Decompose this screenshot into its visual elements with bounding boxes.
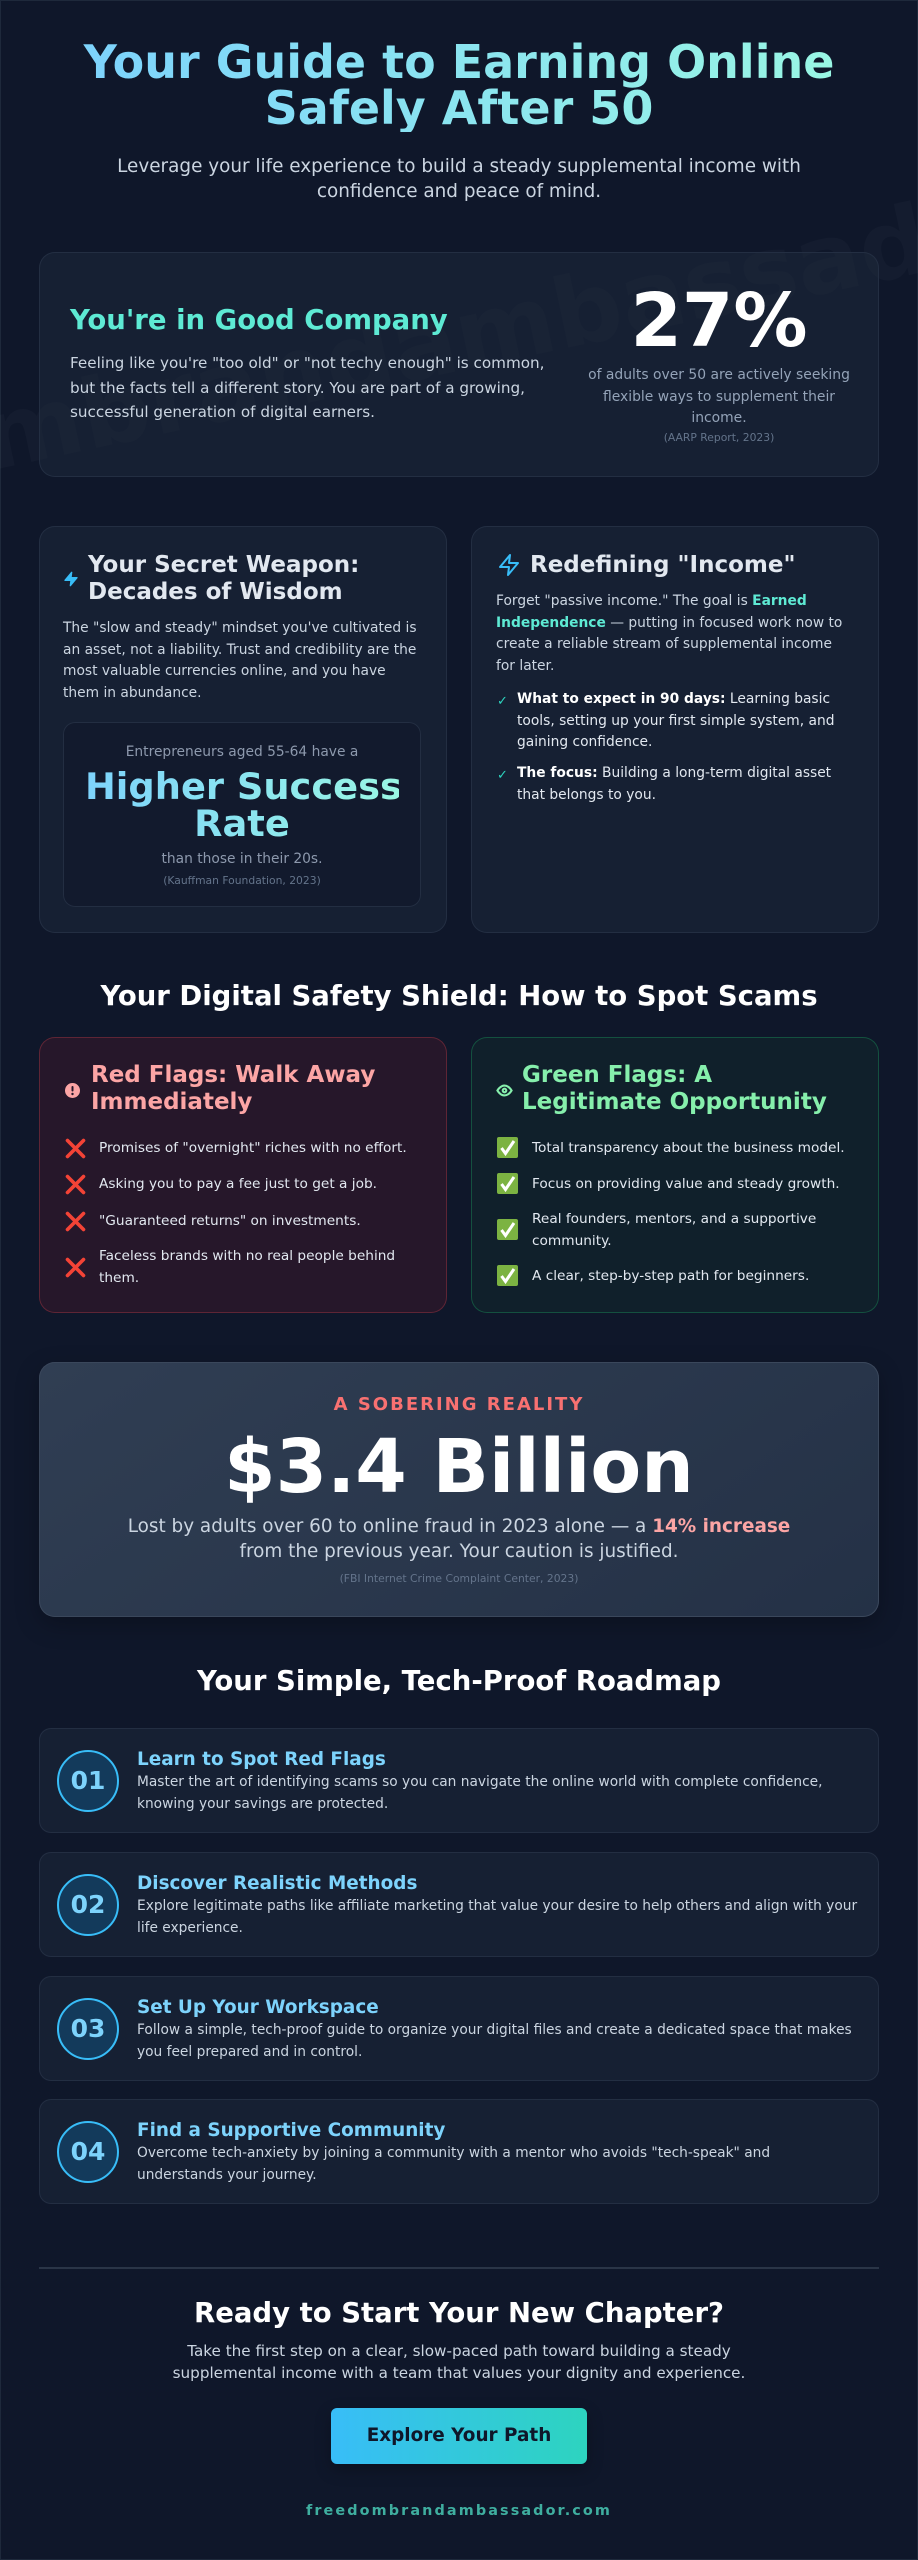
step number: 01 [71,1766,105,1795]
icon: check 2 [497,1173,518,1194]
red flag 1: Promises of "overnight" riches with no effort. [99,1140,407,1156]
heading: Redefining "Income" [530,552,795,578]
heading: Green Flags: A [522,1062,712,1088]
callout source: (Kauffman Foundation, 2023) [163,874,321,887]
label: A SOBERING REALITY [334,1394,584,1415]
step description [137,2145,770,2182]
heading: You're in Good Company [70,304,448,336]
step description: you feel prepared and in control. [137,2044,362,2060]
list item 1 [517,691,834,750]
icon: check 1 [497,1137,518,1158]
icon: cross 1 [66,1138,86,1158]
list item 2: that belongs to you. [517,787,656,803]
title [83,40,835,132]
step number [57,1874,119,1936]
body text [62,620,417,701]
panel: red flags [39,1037,447,1313]
step 2 [39,1852,879,1957]
step 4 [39,2099,879,2204]
step description: Follow a simple, tech-proof guide to organize your digital files and create a dedicated space that makes [137,2022,852,2038]
step number [57,1750,119,1812]
body text: an asset, not a liability. Trust and credibility are the [63,642,416,658]
step number: 03 [71,2014,105,2043]
list item 2 [517,765,831,803]
description: Lost by adults over 60 to online fraud in 2023 alone — a 14% increase [128,1516,790,1537]
icon: cross 2 [66,1174,86,1194]
stat source: (AARP Report, 2023) [664,431,774,444]
step description: Master the art of identifying scams so you can navigate the online world with complete confidence, [137,1774,822,1790]
step title: Learn to Spot Red Flags [137,1749,386,1770]
description [128,1516,790,1562]
big number: $3.4 Billion [224,1424,694,1510]
green flag 3 [532,1211,816,1248]
body text: successful generation of digital earners. [70,403,375,421]
list item 1: gaining confidence. [517,734,652,750]
body text: Forget "passive income." The goal is Earned [496,593,807,609]
red flag 3: "Guaranteed returns" on investments. [99,1213,361,1229]
heading [91,1062,375,1115]
step description [137,1898,858,1936]
red flag 4 [99,1248,395,1286]
step description: Overcome tech-anxiety by joining a community with a mentor who avoids "tech-speak" and [137,2145,770,2161]
panel: you're in good company [39,252,879,477]
cta text: supplemental income with a team that values your dignity and experience. [173,2364,745,2382]
callout: higher success rate [63,722,421,907]
step number [57,2121,119,2183]
source: (FBI Internet Crime Complaint Center, 2023) [340,1572,578,1585]
body text: most valuable currencies online, and you have [63,663,386,679]
body text: Feeling like you're "too old" or "not techy enough" is common, [70,354,545,372]
body text: create a reliable stream of supplemental income [496,636,832,652]
step number: 04 [71,2137,105,2166]
step title: Set Up Your Workspace [137,1997,379,2018]
subtitle: confidence and peace of mind. [317,181,601,202]
icon: bolt [64,572,78,586]
subtitle [117,156,801,202]
step description: understands your journey. [137,2166,317,2182]
icon: check 3 [497,1219,518,1240]
step description [137,2022,852,2060]
green flag 3: Real founders, mentors, and a supportive [532,1211,816,1227]
callout lead-in: Entrepreneurs aged 55-64 have a [126,744,358,760]
list item 1: tools, setting up your first simple system, and [517,713,834,729]
cta button: Explore Your Path [367,2425,551,2446]
green flag 3: community. [532,1232,612,1248]
list item 2: The focus: Building a long-term digital asset [517,765,831,781]
green flag 1: Total transparency about the business model. [532,1140,845,1156]
green flag 2: Focus on providing value and steady growth. [532,1176,840,1192]
step description: knowing your savings are protected. [137,1796,388,1812]
heading [88,552,359,605]
body text: The "slow and steady" mindset you've cultivated is [63,620,417,636]
body text: for later. [496,658,554,674]
description: from the previous year. Your caution is justified. [239,1541,678,1562]
section heading: safety shield: Your Digital Safety Shield: How to Spot Scams [100,980,818,1012]
icon: bolt outline [499,554,519,576]
callout figure [85,769,399,843]
callout figure: Higher Success [85,765,402,808]
stat caption: income. [691,410,747,426]
callout follow-up: than those in their 20s. [161,851,323,867]
cta heading: Ready to Start Your New Chapter? [194,2297,724,2329]
callout figure: Rate [194,802,290,845]
step description [137,1774,822,1812]
stat caption [588,367,850,426]
green flag 4: A clear, step-by-step path for beginners. [532,1268,809,1284]
icon: check 4 [497,1265,518,1286]
heading: Immediately [91,1089,252,1115]
icon: alert circle [65,1083,80,1098]
section heading: roadmap: Your Simple, Tech-Proof Roadmap [197,1665,721,1697]
list item 1: What to expect in 90 days: Learning basic [517,691,830,707]
heading [522,1062,827,1115]
check mark 1: ✓ [497,694,508,709]
footer url: freedombrandambassador.com [306,2503,612,2519]
body text: them in abundance. [63,685,202,701]
red flag 2: Asking you to pay a fee just to get a job. [99,1176,377,1192]
step 1 [39,1728,879,1833]
red flag 4: them. [99,1270,139,1286]
body text [70,354,545,421]
cta text: Take the first step on a clear, slow-paced path toward building a steady [187,2342,731,2360]
step title: Find a Supportive Community [137,2120,445,2141]
body text: but the facts tell a different story. You are part of a growing, [70,378,525,396]
step title: Discover Realistic Methods [137,1873,417,1894]
stat caption: of adults over 50 are actively seeking [588,367,850,383]
panel: secret weapon [39,526,447,933]
step number [57,1998,119,2060]
heading: Your Secret Weapon: [88,552,359,578]
cta text [173,2342,745,2382]
panel: redefining income [471,526,879,933]
check mark 2: ✓ [497,768,508,783]
panel: sobering reality [39,1362,879,1617]
step description: life experience. [137,1920,243,1936]
heading: Legitimate Opportunity [522,1089,827,1115]
stat: 27%: 27% [630,278,808,364]
stat caption: flexible ways to supplement their [603,388,835,404]
panel: green flags [471,1037,879,1313]
step number: 02 [71,1890,105,1919]
icon: cross 3 [66,1212,86,1232]
title: Your Guide to Earning Online [84,35,834,89]
icon: cross 4 [66,1258,86,1278]
red flag 4: Faceless brands with no real people behind [99,1248,395,1264]
step 3 [39,1976,879,2081]
icon: eye [496,1084,513,1096]
heading: Red Flags: Walk Away [91,1062,375,1088]
body text: Independence — putting in focused work now to [496,615,842,631]
step description: Explore legitimate paths like affiliate marketing that value your desire to help others and align with your [137,1898,857,1914]
subtitle: Leverage your life experience to build a steady supplemental income with [117,156,801,177]
body text [496,593,842,674]
cta button [331,2408,587,2464]
title: Safely After 50 [265,81,653,135]
heading: Decades of Wisdom [88,579,343,605]
